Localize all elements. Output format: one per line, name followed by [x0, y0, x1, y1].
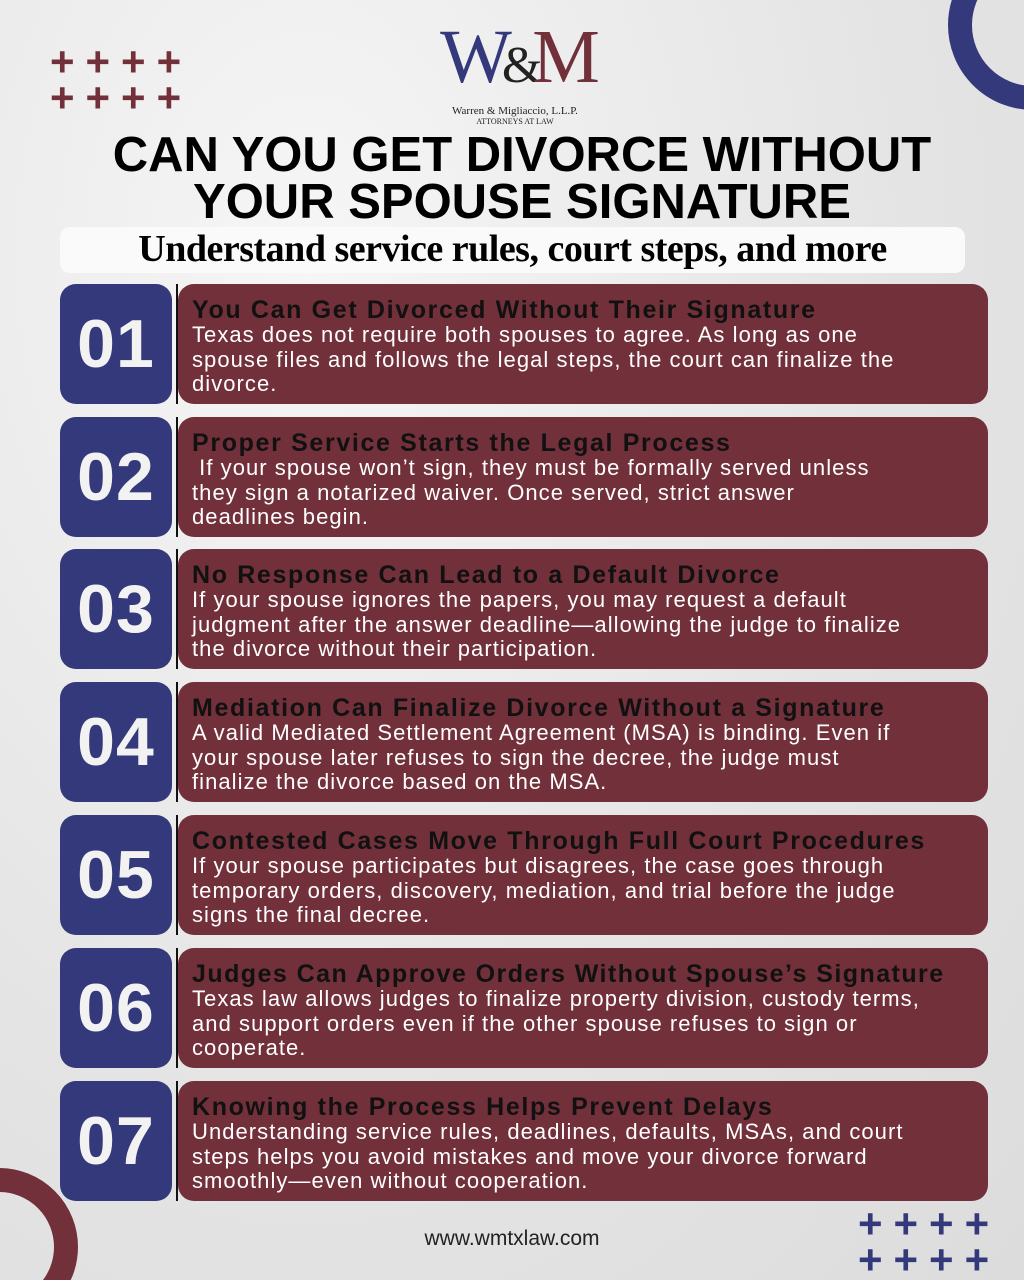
- item 02: they sign a notarized waiver. Once served, strict answer: [192, 480, 795, 504]
- item 04: [60, 682, 988, 802]
- decoration: top-left plus signs: ++++: [50, 38, 192, 85]
- item 04: 04: [77, 704, 155, 780]
- item 06: cooperate.: [192, 1035, 306, 1060]
- item 03: 03: [77, 571, 155, 647]
- decoration: top-left plus signs: [50, 38, 192, 121]
- item 03: No Response Can Lead to a Default Divorce: [192, 561, 781, 589]
- item 03: the divorce without their participation.: [192, 636, 597, 661]
- item 04: Mediation Can Finalize Divorce Without a Signature: [192, 694, 885, 722]
- title: [113, 128, 931, 229]
- item 05: 05: [77, 837, 155, 913]
- item 07: Understanding service rules, deadlines, defaults, MSAs, and court: [192, 1119, 903, 1144]
- item 04: A valid Mediated Settlement Agreement (MSA) is binding. Even if: [192, 720, 890, 745]
- decoration: bottom-left maroon ring: [0, 1168, 78, 1280]
- item 07: smoothly—even without cooperation.: [192, 1168, 588, 1193]
- subtitle: Understand service rules, court steps, and more: [138, 228, 887, 270]
- item 01: [60, 284, 988, 404]
- item 07: steps helps you avoid mistakes and move your divorce forward: [192, 1144, 868, 1168]
- item 05: signs the final decree.: [192, 902, 430, 927]
- item 05: [60, 815, 988, 935]
- item 02: [60, 417, 988, 537]
- item 06: [60, 948, 988, 1068]
- decoration: bottom-right plus signs: ++++: [858, 1200, 1000, 1247]
- logo: Warren & Migliaccio, L.L.P.: [452, 105, 578, 117]
- item 02: Proper Service Starts the Legal Process: [192, 429, 732, 457]
- item 01: 01: [77, 306, 155, 382]
- item 04: your spouse later refuses to sign the decree, the judge must: [192, 744, 840, 770]
- item 03: If your spouse ignores the papers, you may request a default: [192, 587, 847, 612]
- item 07: 07: [77, 1103, 155, 1179]
- item 02: deadlines begin.: [192, 504, 369, 529]
- item 01: divorce.: [192, 371, 277, 396]
- item 04: finalize the divorce based on the MSA.: [192, 769, 607, 794]
- item 06: Texas law allows judges to finalize property division, custody terms,: [192, 986, 920, 1011]
- title: CAN YOU GET DIVORCE WITHOUT: [113, 128, 931, 182]
- item 05: Contested Cases Move Through Full Court Procedures: [192, 827, 926, 855]
- item 01: You Can Get Divorced Without Their Signature: [192, 296, 817, 324]
- item 06: and support orders even if the other spouse refuses to sign or: [192, 1010, 858, 1036]
- item 03: [60, 549, 988, 669]
- item 07: [60, 1081, 988, 1201]
- title: YOUR SPOUSE SIGNATURE: [193, 175, 851, 229]
- item 05: If your spouse participates but disagrees, the case goes through: [192, 853, 884, 878]
- logo: W&M: [440, 15, 590, 99]
- decoration: top-left plus signs: ++++: [50, 74, 192, 121]
- item 07: Knowing the Process Helps Prevent Delays: [192, 1093, 773, 1121]
- item 06: 06: [77, 970, 155, 1046]
- item 05: temporary orders, discovery, mediation, and trial before the judge: [192, 878, 896, 902]
- footer url: www.wmtxlaw.com: [424, 1227, 600, 1250]
- decoration: top-right blue ring: [948, 0, 1024, 110]
- item 01: spouse files and follows the legal steps, the court can finalize the: [192, 346, 894, 372]
- decoration: bottom-right plus signs: [858, 1200, 1000, 1280]
- item 02: 02: [77, 439, 155, 515]
- item 02: If your spouse won’t sign, they must be formally served unless: [199, 455, 870, 480]
- logo: ATTORNEYS AT LAW: [476, 117, 554, 126]
- item 03: judgment after the answer deadline—allowing the judge to finalize: [192, 612, 901, 636]
- item 06: Judges Can Approve Orders Without Spouse’s Signature: [192, 960, 945, 988]
- item 01: Texas does not require both spouses to agree. As long as one: [192, 322, 858, 347]
